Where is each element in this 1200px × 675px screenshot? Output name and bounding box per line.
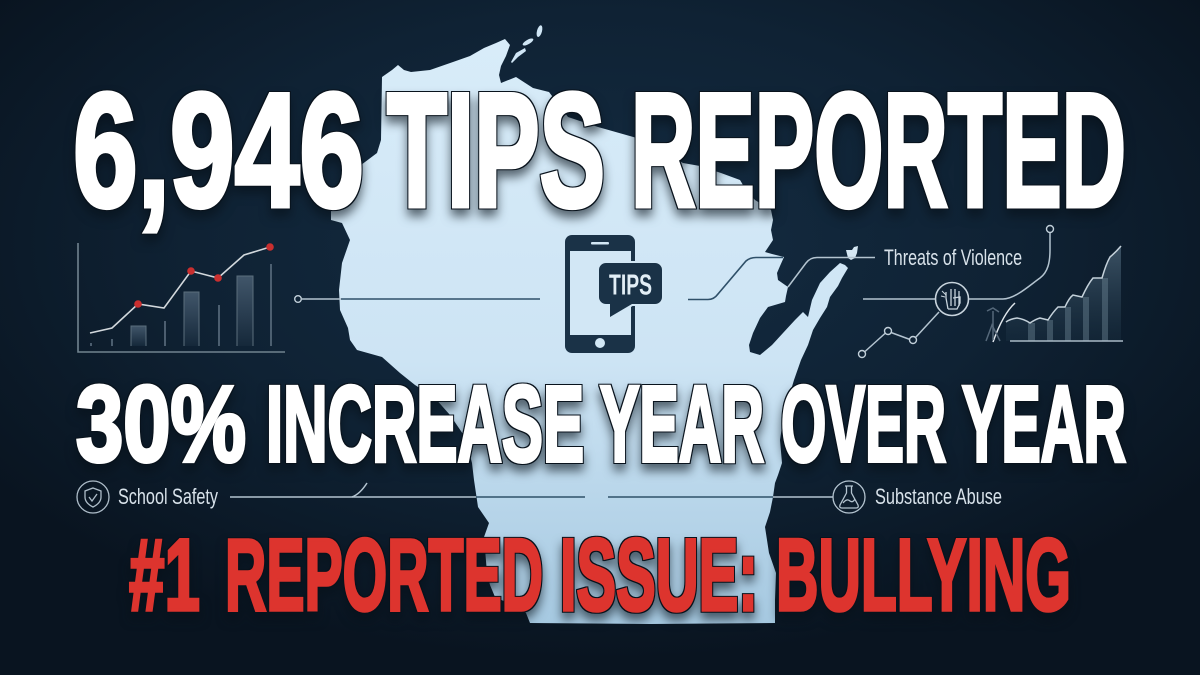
- title: 6,946 tips reported: TIPS: [387, 60, 605, 241]
- label: substance abuse: Substance Abuse: [875, 484, 1002, 509]
- callout: #1 reported issue bullying: REPORTED: [225, 518, 543, 632]
- connector: substance abuse line: [608, 496, 833, 498]
- title: 6,946 tips reported: 6,946: [73, 60, 364, 241]
- icon: washington island: [846, 246, 858, 260]
- subtitle: 30% increase year over year: OVER: [781, 363, 946, 484]
- callout: #1 reported issue bullying: ISSUE:: [560, 518, 758, 632]
- icon: phone with tips bubble: [565, 235, 662, 353]
- callout: #1 reported issue bullying: [129, 518, 1071, 632]
- icon: shield: [77, 481, 109, 513]
- subtitle: 30% increase year over year: INCREASE: [266, 363, 584, 484]
- map: Wisconsin silhouette: [331, 25, 858, 624]
- title: 6,946 tips reported: [73, 60, 1126, 241]
- label: substance abuse: [833, 481, 1002, 513]
- connector: phone to threats of violence: [688, 258, 875, 300]
- subtitle: 30% increase year over year: YEAR: [600, 363, 764, 484]
- bar and line chart: left: [78, 243, 285, 352]
- connector: chart to phone: [295, 296, 540, 302]
- icon: apostle islands: [511, 25, 543, 63]
- label: school safety: [77, 481, 218, 513]
- label: school safety: School Safety: [118, 484, 218, 509]
- area chart: right: [986, 246, 1123, 342]
- callout: #1 reported issue bullying: #1: [129, 518, 200, 632]
- connector: school safety line: [230, 483, 585, 497]
- label: tips: TIPS: [609, 270, 652, 302]
- subtitle: 30% increase year over year: [76, 363, 1126, 484]
- hand icon with connector lines: [858, 226, 1054, 358]
- label: threats of violence: Threats of Violence: [884, 245, 1022, 270]
- subtitle: 30% increase year over year: 30%: [76, 363, 246, 484]
- icon: flask: [833, 481, 865, 513]
